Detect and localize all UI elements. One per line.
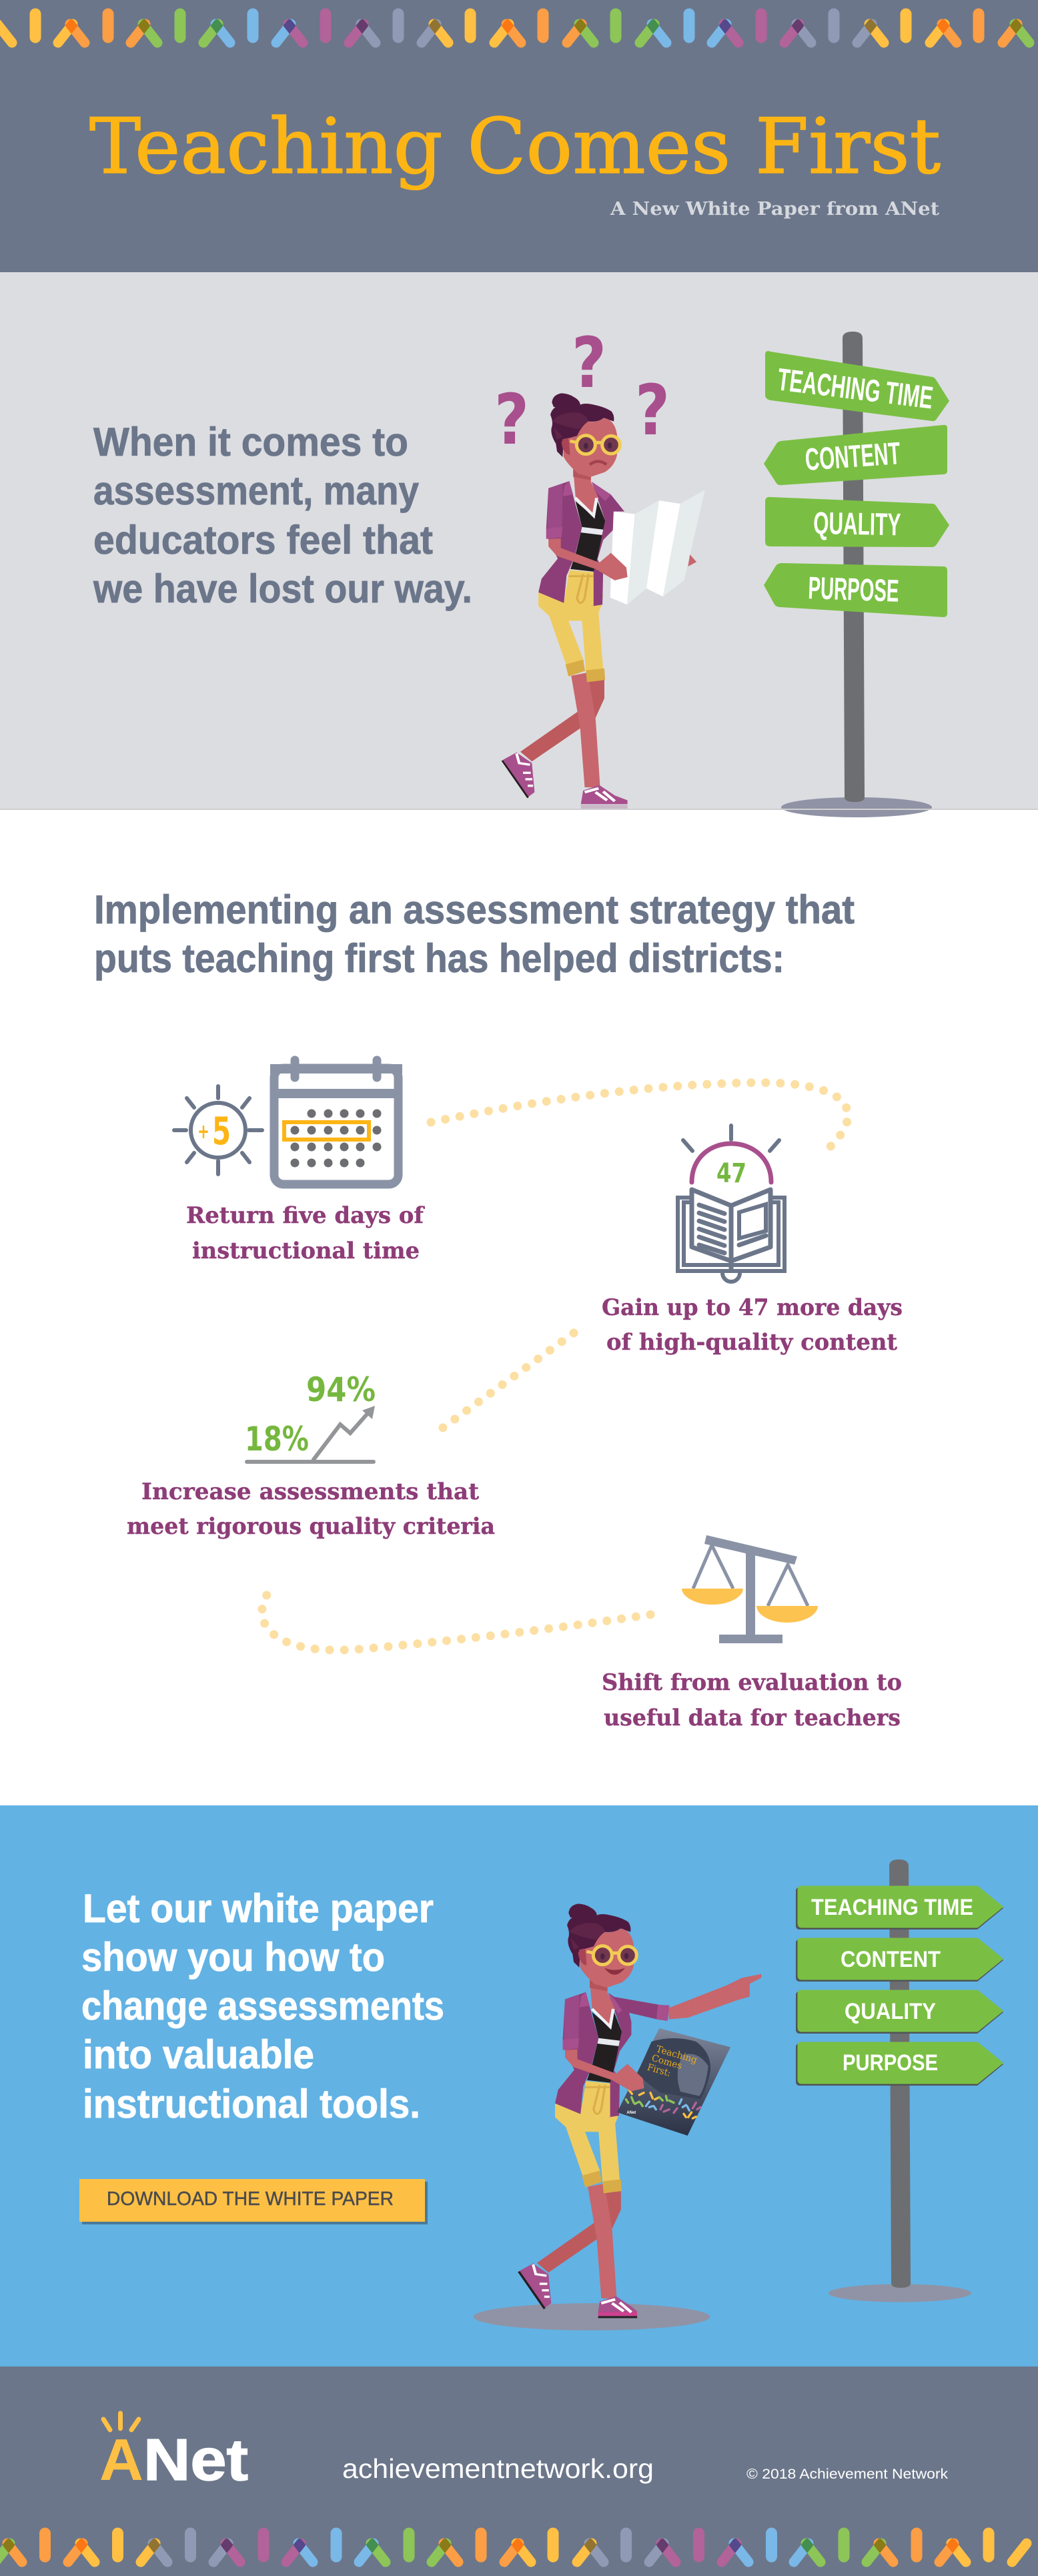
forearm over cover (563, 2038, 644, 2092)
dotted path: book to chart (441, 1333, 574, 1429)
icon: calendar (270, 1060, 402, 1184)
sign: quality (796, 1991, 1003, 2034)
caption: increase assessments (127, 1478, 495, 1540)
icon: plus five sun (174, 1086, 262, 1174)
text: copyright: © 2018 Achievement Network (746, 2467, 949, 2482)
heading: implementing strategy: puts teaching first has helped districts: (94, 936, 785, 981)
decorative band: bottom (0, 2533, 1027, 2562)
pole base shadow (829, 2284, 971, 2302)
text block: call to action: show you how to (81, 1935, 385, 1980)
sign: purpose: PURPOSE (808, 570, 899, 608)
caption: return five days: Return five days of (186, 1202, 425, 1229)
sign: teaching time (765, 351, 949, 421)
text block: lost our way: assessment, many (93, 468, 420, 513)
panel: header background (0, 0, 1038, 272)
subtitle: A New White Paper from ANet (610, 199, 940, 220)
dotted path: calendar to book (431, 1083, 848, 1149)
sign: teaching time (796, 1887, 1003, 1929)
sign: purpose: PURPOSE (843, 2050, 938, 2076)
chart: 18 percent to 94 percent: 94% (306, 1370, 376, 1409)
heading: implementing strategy: Implementing an assessment strategy that (94, 887, 855, 932)
icon: question marks: ? (572, 322, 606, 404)
icon: book with 47 (678, 1126, 785, 1282)
caption: return five days (186, 1202, 425, 1264)
caption: increase assessments: Increase assessments that (141, 1478, 479, 1505)
sign: teaching time: TEACHING TIME (776, 361, 935, 415)
caption: increase assessments: meet rigorous quality criteria (127, 1513, 495, 1540)
pole (889, 1859, 911, 2288)
icon: plus five sun: 5 (212, 1110, 231, 1154)
pole base shadow (781, 797, 932, 817)
illustration: confused teacher with map (502, 393, 705, 809)
chart: 18 percent to 94 percent (245, 1370, 376, 1462)
icon: question marks: ? (494, 379, 529, 460)
white paper cover: Comes (650, 2053, 683, 2072)
sign: purpose (764, 563, 947, 617)
caption: gain 47 days (602, 1294, 903, 1356)
decorative band: top (0, 14, 1029, 43)
sign: quality (765, 497, 949, 547)
sign: quality: QUALITY (845, 1999, 936, 2024)
sign: purpose (796, 2043, 1003, 2086)
caption: gain 47 days: Gain up to 47 more days (602, 1294, 903, 1321)
text block: lost our way (93, 420, 472, 611)
caption: shift from evaluation (602, 1669, 902, 1731)
panel: call to action background (0, 1805, 1038, 2367)
panel: footer background (0, 2367, 1038, 2576)
caption: shift from evaluation: useful data for teachers (604, 1705, 901, 1731)
signpost: lost way (764, 332, 949, 817)
icon: question marks: ? (635, 370, 670, 451)
chart: 18 percent to 94 percent: 18% (245, 1420, 309, 1458)
button: download (79, 2179, 428, 2224)
sign: content (796, 1939, 1003, 1982)
caption: gain 47 days: of high-quality content (606, 1329, 897, 1356)
white paper cover (617, 2028, 730, 2136)
white paper cover: First: (646, 2062, 672, 2079)
icon: balance scale (682, 1535, 818, 1643)
logo: ANet: A (99, 2427, 143, 2493)
sign: content (764, 425, 947, 485)
text block: call to action: instructional tools. (83, 2082, 420, 2126)
logo: ANet (99, 2413, 248, 2493)
caption: return five days: instructional time (192, 1238, 420, 1264)
panel: lost our way background (0, 272, 1038, 810)
text: website: achievementnetwork.org (342, 2453, 654, 2484)
text block: lost our way: educators feel that (93, 518, 433, 562)
dotted path: chart to scale (262, 1593, 650, 1650)
white paper cover: ANet (626, 2111, 636, 2115)
sign: teaching time: TEACHING TIME (811, 1895, 973, 1920)
logo: ANet: Net (143, 2427, 248, 2493)
illustration: pointing teacher with white paper (474, 1903, 761, 2330)
white paper cover: Teaching (655, 2044, 698, 2066)
text block: call to action (81, 1886, 444, 2126)
icon: question marks (494, 322, 670, 460)
sign: content: CONTENT (804, 435, 902, 477)
signpost: call to action (796, 1859, 1003, 2302)
sign: quality: QUALITY (813, 505, 901, 542)
pole (843, 332, 865, 802)
text block: call to action: change assessments (81, 1984, 444, 2028)
divider strip (0, 809, 1038, 810)
text block: lost our way: When it comes to (93, 420, 408, 464)
text block: call to action: Let our white paper (83, 1886, 434, 1931)
text block: lost our way: we have lost our way. (93, 566, 472, 611)
caption: shift from evaluation: Shift from evaluation to (602, 1669, 902, 1696)
button: download: DOWNLOAD THE WHITE PAPER (107, 2188, 394, 2210)
title: Teaching Comes First (89, 102, 941, 191)
heading: implementing strategy (94, 887, 855, 981)
icon: plus five sun: + (197, 1120, 209, 1144)
text block: call to action: into valuable (83, 2032, 314, 2077)
icon: book with 47: 47 (716, 1158, 746, 1189)
sign: content: CONTENT (841, 1947, 941, 1972)
